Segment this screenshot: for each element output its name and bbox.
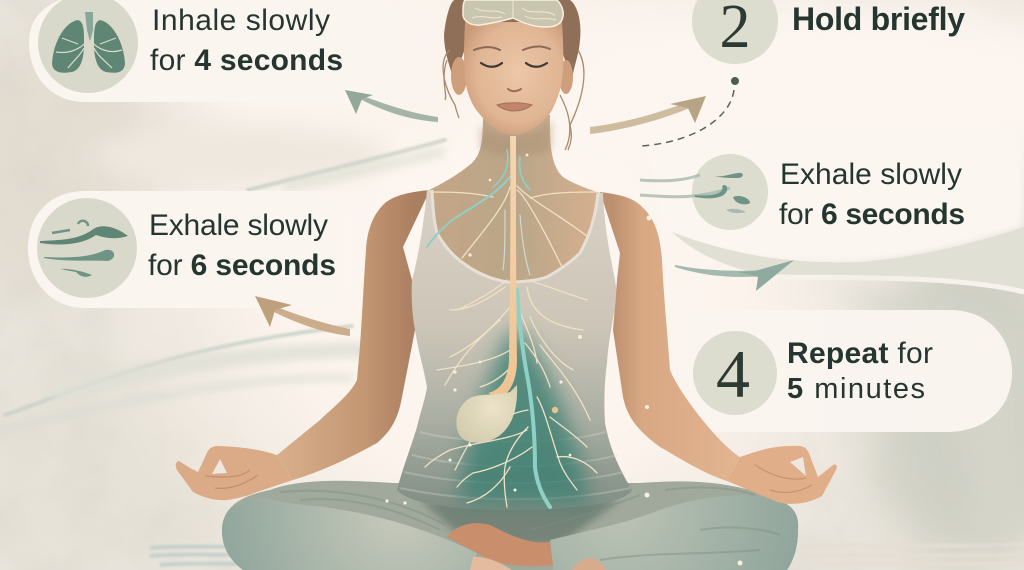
right arm	[600, 192, 740, 481]
hair back	[444, 0, 580, 80]
vagus nerve branches	[425, 186, 597, 507]
figure: seated meditating woman	[176, 0, 837, 570]
panel: step 4 pill	[640, 310, 1012, 432]
right hand	[727, 446, 837, 504]
tank folds	[400, 432, 630, 499]
air swooshes left	[0, 140, 445, 430]
left calf fold	[222, 497, 477, 570]
dark teal core of the torso	[460, 330, 590, 503]
arrow: inhale	[345, 90, 438, 122]
panel: right upper white area	[650, 130, 1024, 262]
vagus nerve teal trunk	[427, 150, 550, 507]
left hand	[176, 446, 293, 500]
glowing particles	[385, 154, 742, 566]
step 4: repeat	[693, 331, 933, 415]
number badge 2	[692, 0, 778, 64]
text: repeat for 5 minutes: 5 minutes	[787, 373, 925, 405]
face	[464, 22, 563, 135]
air band right	[672, 227, 1024, 540]
neck and shoulders	[425, 115, 600, 285]
facial features	[474, 46, 550, 111]
number badge 4: 4	[716, 336, 750, 412]
text: exhale slowly for 6 seconds: Exhale slowly	[780, 158, 962, 191]
panel: step 1 inhale pill	[29, 0, 445, 102]
neck shadow	[480, 120, 552, 156]
panel: step 3 exhale pill left	[28, 191, 385, 308]
text: inhale slowly for 4 seconds	[150, 4, 343, 77]
text: exhale slowly for 6 seconds: Exhale slowly	[149, 209, 328, 242]
step 3: exhale right	[640, 154, 965, 231]
water ripples	[150, 544, 1024, 565]
text: repeat for 5 minutes: Repeat for	[787, 337, 933, 370]
icon: lungs	[38, 0, 138, 93]
text: exhale slowly for 6 seconds: for 6 seconds	[148, 249, 336, 282]
vagus nerve spinal trunk	[488, 136, 517, 398]
cloth folds	[280, 487, 780, 560]
text: hold briefly: Hold briefly	[792, 1, 965, 37]
inner thigh shadow	[420, 500, 620, 545]
ears	[451, 57, 573, 95]
right shin fold	[550, 493, 798, 570]
text: exhale slowly for 6 seconds	[779, 158, 965, 231]
stomach	[456, 385, 517, 443]
shin and feet	[447, 523, 606, 570]
text: inhale slowly for 4 seconds: Inhale slowly	[152, 4, 330, 37]
brain overlay	[463, 0, 563, 27]
step 1: inhale	[38, 0, 343, 93]
step 2: hold	[692, 0, 965, 64]
text: exhale slowly for 6 seconds	[148, 209, 336, 282]
left arm	[277, 190, 430, 480]
tank top	[397, 190, 632, 510]
arrow: exhale left	[255, 296, 350, 336]
text: repeat for 5 minutes	[787, 337, 933, 405]
number badge 4	[693, 331, 777, 415]
dashed connector to step 2	[640, 77, 739, 146]
hair wisps	[443, 50, 584, 150]
arrow: exhale right	[675, 260, 794, 291]
icon: breath waves	[37, 198, 137, 298]
arrow: to hold	[590, 96, 706, 134]
text: exhale slowly for 6 seconds: for 6 seconds	[779, 198, 965, 231]
step 3: exhale left	[37, 198, 336, 298]
legs	[222, 481, 798, 570]
icon: breath waves with trails	[640, 154, 768, 230]
text: inhale slowly for 4 seconds: for 4 seconds	[150, 44, 343, 77]
